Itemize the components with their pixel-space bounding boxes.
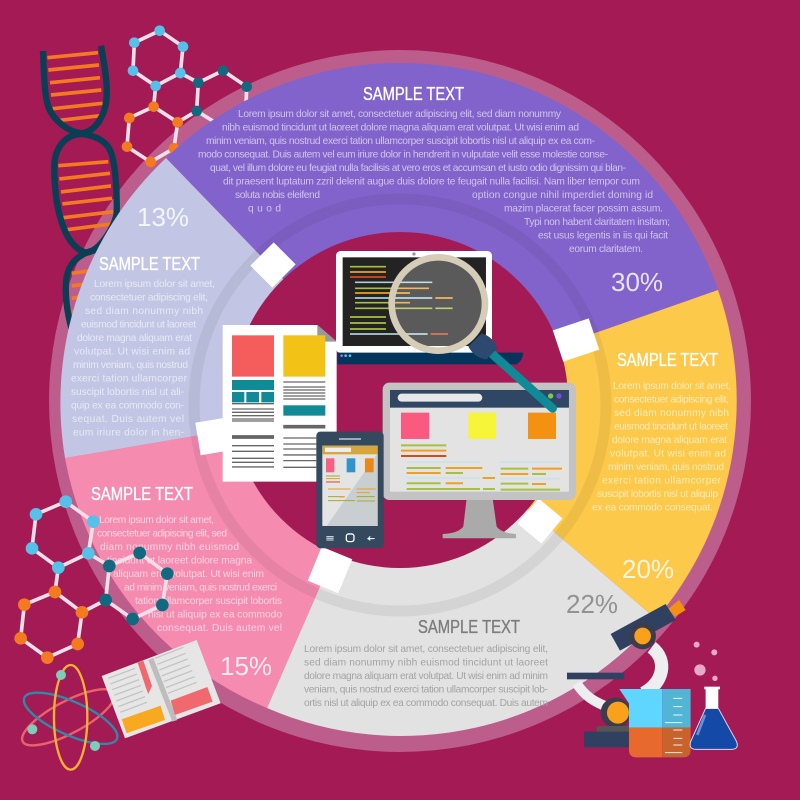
panel: pink 15%: tation ullamcorper suscipit lobortis — [135, 596, 282, 607]
panel: yellow 20%: SAMPLE TEXT — [617, 350, 718, 370]
panel: gray 22%: SAMPLE TEXT — [418, 617, 520, 637]
panel: pink 15%: SAMPLE TEXT — [91, 484, 193, 504]
panel: purple 30%: quat, vel illum dolore eu feugiat nulla facilisis at vero eros et accumsan et iusto odio dignissim qui blan- — [210, 163, 626, 174]
icon: DNA helix — [43, 46, 117, 337]
magnifying glass — [392, 257, 553, 408]
icon: measuring beaker — [619, 689, 691, 757]
panel: pink 15%: nisl ut aliquip ex ea commodo — [148, 610, 282, 620]
panel: gray 22%: ortis nisl ut aliquip ex ea commodo consequat. Duis autem — [304, 698, 548, 709]
panel: yellow 20%: minim veniam, quis nostrud — [608, 462, 724, 473]
icon: lower molecule — [14, 495, 174, 664]
central devices illustration — [223, 251, 576, 548]
panel: lavender 13%: sequat. Duis autem vel — [72, 414, 184, 425]
icon: open book — [102, 640, 221, 738]
document page — [223, 325, 337, 482]
panel: purple 30%: Lorem ipsum dolor sit amet, consectetuer adipiscing elit, sed diam nonummy — [238, 109, 562, 120]
icon: atom — [15, 665, 124, 770]
icon: microscope — [567, 600, 686, 747]
panel: pink 15%: diam nonummy nibh euismod — [100, 542, 239, 553]
panel: pink 15%: consectetuer adipiscing elit, sed — [97, 528, 227, 540]
panel: purple 30%: soluta nobis eleifend — [235, 190, 320, 201]
panel: yellow 20%: sed diam nonummy nibh — [614, 408, 729, 419]
panel: pink 15%: Lorem ipsum dolor sit amet, — [99, 515, 214, 526]
monitor — [383, 383, 576, 538]
panel: pink 15%: consequat. Duis autem vel — [157, 623, 282, 634]
panel: pink 15%: 15% — [220, 651, 272, 681]
panel: yellow 20%: volutpat. Ut wisi enim ad — [610, 448, 726, 460]
panel: lavender 13%: SAMPLE TEXT — [99, 254, 200, 274]
panel: pink 15%: ad minim veniam, quis nostrud exerci — [124, 582, 277, 594]
icon: flask with bubbles — [690, 642, 737, 749]
panel: purple 30%: eorum claritatem. — [569, 244, 643, 255]
panel: gray 22%: veniam, quis nostrud exerci tation ullamcorper suscipit lob- — [304, 684, 548, 696]
panel: purple 30%: Typi non habent claritatem insitam; — [524, 217, 670, 228]
center circle — [232, 232, 568, 568]
panel: lavender 13%: Lorem ipsum dolor sit amet, — [94, 279, 215, 290]
panel: lavender 13%: sed diam nonummy nibh — [85, 306, 203, 317]
panel: lavender 13%: eum iriure dolor in hen- — [73, 428, 184, 438]
panel: purple 30%: nibh euismod tincidunt ut laoreet dolore magna aliquam erat volutpat. Ut wisi enim ad — [222, 122, 579, 134]
panel: gray 22%: sed diam nonummy nibh euismod tincidunt ut laoreet — [304, 658, 548, 668]
laptop with code — [336, 251, 523, 364]
panel: pink 15% — [65, 401, 401, 708]
panel: gray 22% — [267, 401, 656, 736]
panel: gray 22%: Lorem ipsum dolor sit amet, consectetuer adipiscing elit, — [304, 644, 548, 655]
panel: purple 30%: est usus legentis in iis qui facit — [538, 230, 668, 242]
panel: lavender 13% — [60, 158, 401, 458]
panel: yellow 20%: exerci tation ullamcorper — [602, 476, 722, 486]
panel: purple 30%: option congue nihil imperdiet doming id — [472, 190, 653, 201]
panel: lavender 13%: 13% — [137, 202, 189, 232]
panel: yellow 20%: euismod tincidunt ut laoreet — [614, 422, 728, 432]
panel: gray 22%: 22% — [566, 589, 618, 619]
panel: yellow 20%: ex ea commodo consequat. — [592, 502, 713, 514]
panel: purple 30%: mazim placerat facer possim assum. — [504, 204, 663, 214]
panel: gray 22%: dolore magna aliquam erat volutpat. Ut wisi enim ad minim — [304, 671, 548, 682]
panel: lavender 13%: quip ex ea commodo con- — [71, 400, 184, 412]
panel: yellow 20%: suscipit lobortis nisl ut aliquip — [597, 489, 718, 500]
panel: lavender 13%: consectetuer adipiscing elit, — [90, 292, 208, 304]
panel: yellow 20%: dolore magna aliquam erat — [612, 435, 727, 446]
panel: purple 30%: dit praesent luptatum zzril delenit augue duis dolore te feugait nulla facilisi. Nam liber tempor cum — [223, 176, 640, 188]
panel: purple 30%: q u o d — [248, 204, 281, 214]
panel: pink 15%: tincidunt ut laoreet dolore magna — [107, 556, 252, 566]
smartphone — [316, 432, 384, 548]
panel: purple 30%: modo consequat. Duis autem vel eum iriure dolor in hendrerit in vulputate velit esse molestie conse- — [198, 150, 608, 160]
panel: purple 30% — [166, 63, 718, 401]
white connector tabs — [198, 254, 594, 587]
panel: lavender 13%: dolore magna aliquam erat — [77, 333, 192, 344]
panel: lavender 13%: exerci tation ullamcorper — [71, 374, 188, 384]
panel: yellow 20%: 20% — [622, 554, 674, 584]
panel: yellow 20%: consectetuer adipiscing elit, — [614, 394, 729, 406]
panel: lavender 13%: euismod tincidunt ut laoreet — [81, 320, 196, 330]
panel: purple 30%: minim veniam, quis nostrud exerci tation ullamcorper suscipit lobortis nisl ut aliquip ex ea com- — [206, 136, 595, 147]
panel: pink 15%: aliquam erat volutpat. Ut wisi enim — [113, 569, 264, 580]
panel: yellow 20%: Lorem ipsum dolor sit amet, — [613, 381, 731, 392]
panel: yellow 20% — [401, 290, 737, 619]
panel: lavender 13%: volutpat. Ut wisi enim ad — [74, 346, 190, 358]
panel: purple 30%: SAMPLE TEXT — [363, 84, 464, 104]
panel: purple 30%: 30% — [611, 267, 663, 297]
outer pink ring — [49, 50, 751, 752]
panel: lavender 13%: minim veniam, quis nostrud — [73, 360, 188, 371]
inner shaded ring — [194, 199, 606, 611]
icon: upper molecule — [122, 25, 252, 167]
panel: lavender 13%: suscipit lobortis nisl ut ali- — [71, 387, 184, 398]
